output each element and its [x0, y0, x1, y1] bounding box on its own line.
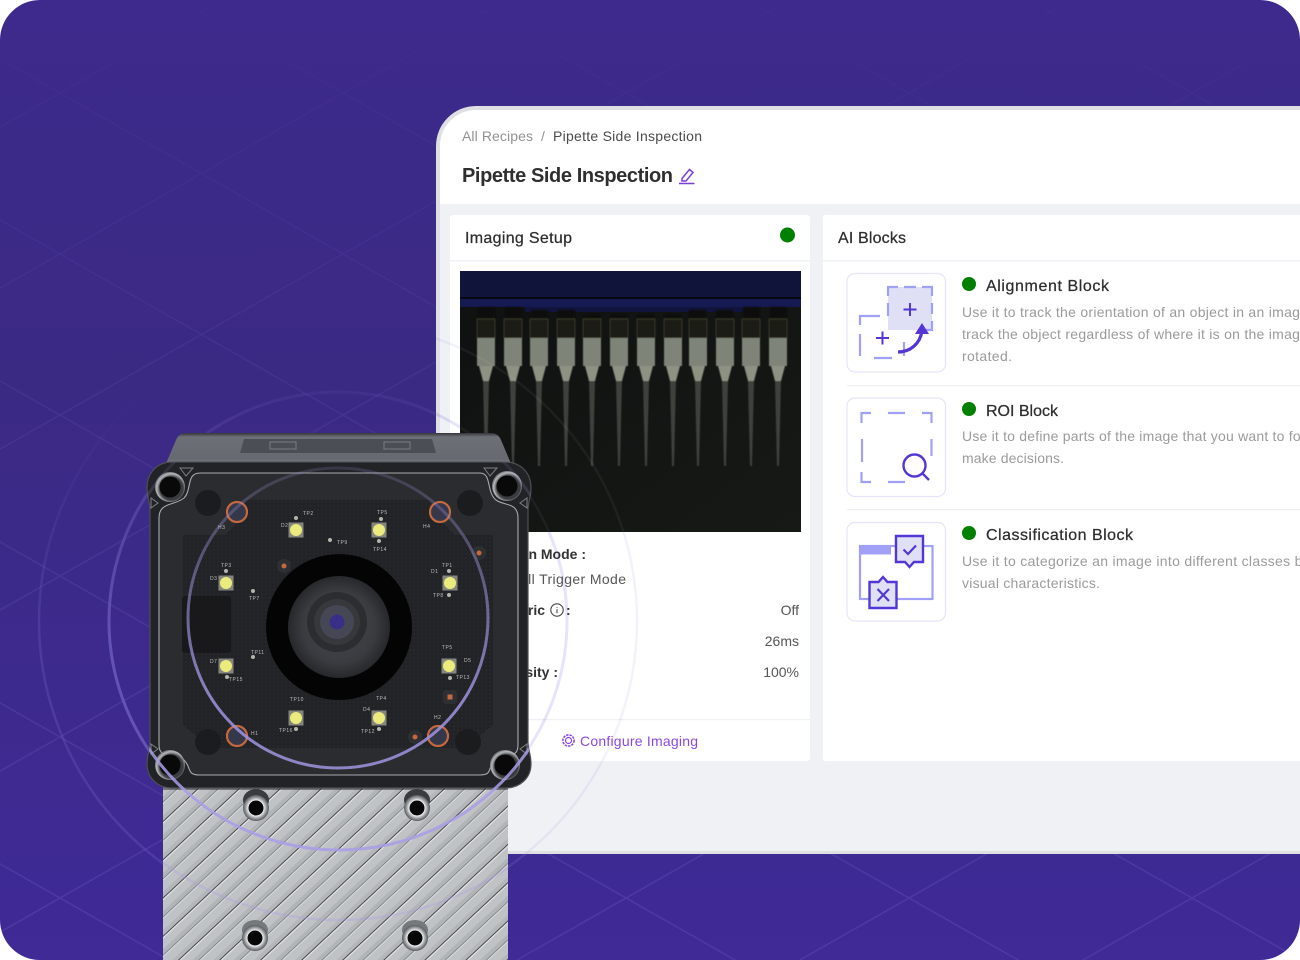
block description: [962, 304, 1300, 364]
block title: Alignment Block: [986, 278, 1110, 295]
block description: [962, 428, 1300, 466]
settings list: Full Trigger Mode: [511, 571, 626, 587]
icon: classification: [860, 536, 932, 608]
board silk labels: TP14: [373, 547, 387, 553]
block description: make decisions.: [962, 450, 1064, 466]
board silk labels: TP9: [337, 540, 348, 546]
board silk labels: D5: [464, 658, 471, 664]
camera front body: [147, 462, 531, 788]
board silk labels: TP1: [442, 563, 453, 569]
settings list: Acquisition Mode :: [461, 546, 586, 562]
top label plate: [240, 439, 436, 453]
indicator: [962, 526, 976, 540]
block title: Classification Block: [986, 527, 1134, 544]
board silk labels: TP5: [442, 645, 453, 651]
board silk labels: TP5: [377, 510, 388, 516]
mounting screws: [242, 789, 430, 951]
camera top housing: [165, 433, 512, 466]
pipette row: [477, 307, 787, 466]
breadcrumb: /: [541, 128, 545, 144]
rings over camera: [148, 462, 530, 922]
board silk labels: H3: [218, 525, 225, 531]
board silk labels: D7: [210, 659, 217, 665]
board silk labels: H1: [251, 731, 258, 737]
settings list: 26ms: [765, 633, 799, 649]
board silk labels: TP3: [221, 563, 232, 569]
settings list: Light Intensity :: [454, 664, 558, 680]
board silk labels: H4: [423, 524, 430, 530]
icon: roi: [862, 413, 932, 482]
orange mount rings: [227, 502, 450, 746]
breadcrumb: All Recipes: [462, 128, 533, 144]
block: roi: [847, 398, 1300, 496]
board silk labels: D4: [363, 707, 370, 713]
settings list: Off: [781, 602, 799, 618]
panel: ai blocks: [823, 215, 1300, 761]
icon: alignment: [860, 287, 932, 358]
board silk labels: H2: [434, 715, 441, 721]
page title: Pipette Side Inspection: [462, 165, 673, 187]
block description: Use it to track the orientation of an object in an image: [962, 304, 1300, 320]
settings list: Metric: [504, 602, 545, 618]
board silk labels: TP16: [279, 728, 293, 734]
board silk labels: TP11: [251, 650, 265, 656]
board silk labels: TP12: [361, 729, 375, 735]
board silk labels: D2: [281, 523, 288, 529]
breadcrumb: Pipette Side Inspection: [553, 128, 702, 144]
board silk labels: D3: [210, 576, 217, 582]
block: classification: [847, 522, 1300, 621]
board silk labels: D1: [431, 569, 438, 575]
settings list: [454, 546, 799, 680]
lens: [266, 554, 412, 700]
corner screws: [155, 471, 522, 780]
block description: rotated.: [962, 348, 1012, 364]
indicator: [962, 277, 976, 291]
board silk labels: TP13: [456, 675, 470, 681]
board silk labels: TP2: [303, 511, 314, 517]
board silk labels: TP4: [376, 696, 387, 702]
breadcrumb: [462, 128, 702, 144]
status dot: [780, 228, 795, 242]
link: configure imaging: Configure Imaging: [580, 733, 698, 749]
board silk labels: TP8: [433, 593, 444, 599]
panel: imaging setup: [450, 215, 810, 761]
settings list: 100%: [763, 664, 799, 680]
heading: ai blocks: AI Blocks: [838, 230, 906, 247]
circuit board: [182, 500, 493, 748]
board silk labels: TP15: [229, 677, 243, 683]
board silk labels: [210, 510, 471, 737]
block: alignment: [847, 274, 1300, 372]
corner blobs: [195, 490, 483, 755]
inspection image: pipettes: [460, 271, 801, 532]
indicator: [962, 402, 976, 416]
app window: [436, 106, 1300, 854]
block description: [962, 553, 1300, 591]
block description: track the object regardless of where it is on the image: [962, 326, 1300, 342]
orange indicators: [277, 546, 486, 744]
leds: [218, 516, 458, 731]
block title: ROI Block: [986, 403, 1059, 420]
rings over window: [436, 338, 638, 854]
heat sink: [163, 786, 508, 960]
heading: imaging setup: Imaging Setup: [465, 230, 572, 247]
camera: [147, 433, 531, 960]
board silk labels: TP7: [249, 596, 260, 602]
block description: visual characteristics.: [962, 575, 1100, 591]
board silk labels: TP10: [290, 697, 304, 703]
icon: edit pencil: [679, 170, 694, 184]
settings list: :: [566, 602, 571, 618]
